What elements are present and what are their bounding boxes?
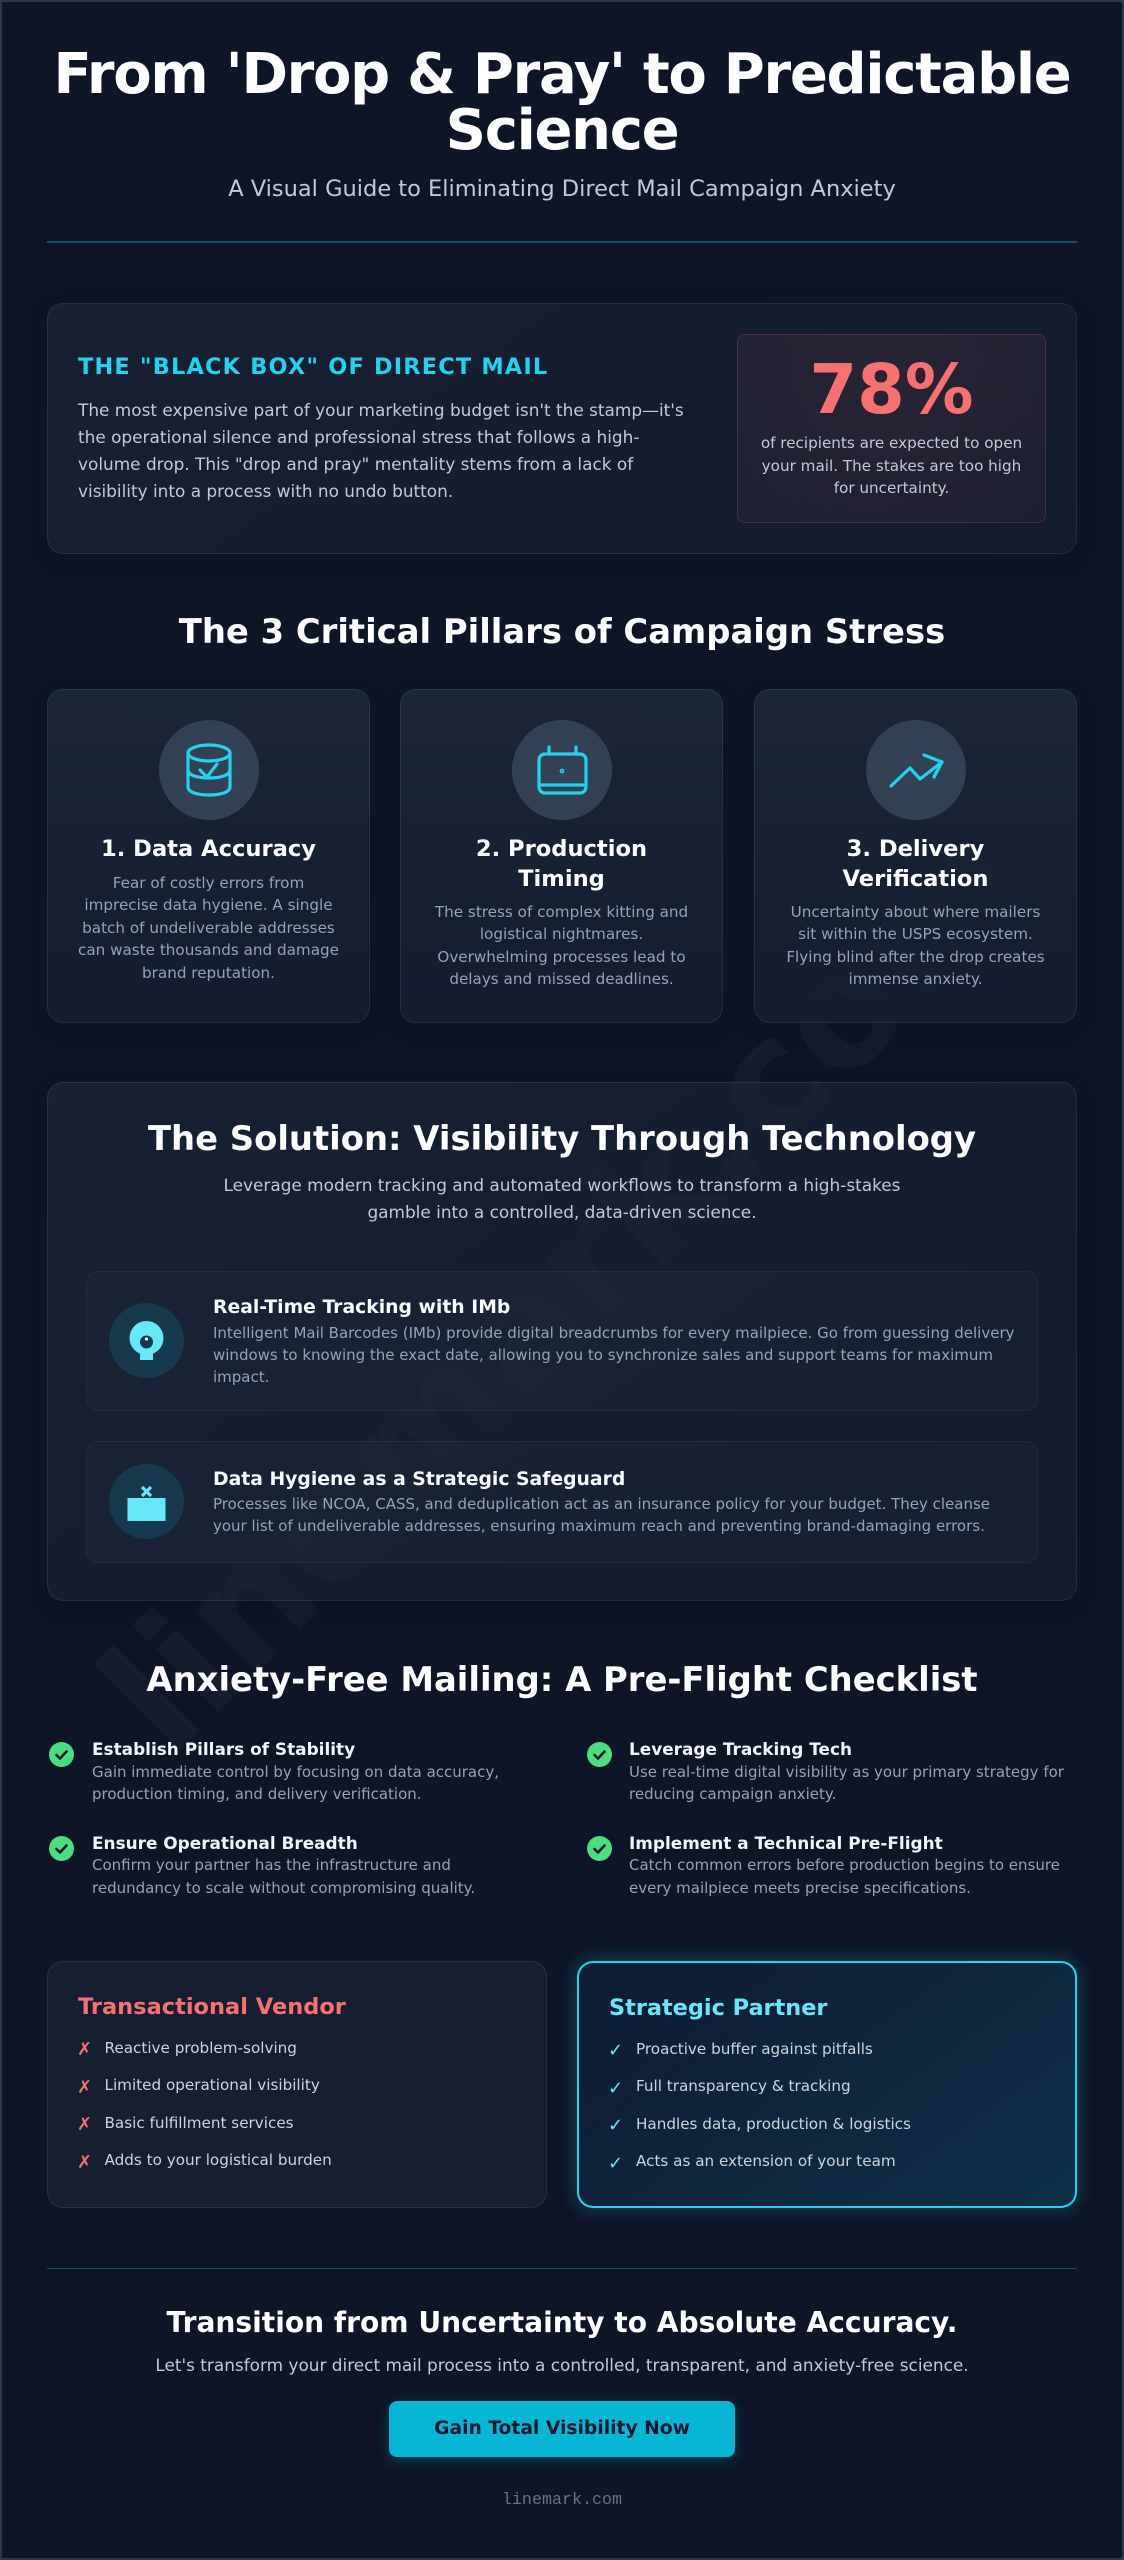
checklist item: breadth: [49, 1832, 475, 1897]
button: Gain Total Visibility Now: [434, 2418, 690, 2439]
feature text: [213, 1324, 1014, 1386]
feature: data hygiene: [86, 1441, 1038, 1563]
partner title: Strategic Partner: [609, 1994, 827, 2020]
panel body text: the operational silence and professional stress that follows a high-: [78, 427, 639, 447]
item text: Catch common errors before production begins to ensure: [629, 1856, 1060, 1874]
vendor list: [77, 2038, 332, 2173]
item title: Leverage Tracking Tech: [629, 1739, 852, 1759]
vendor list: ✗: [77, 2039, 92, 2060]
item text: [629, 1762, 1064, 1803]
item text: redundancy to scale without compromising quality.: [92, 1879, 475, 1897]
panel: solution: [47, 1082, 1077, 1601]
stat caption: of recipients are expected to open: [761, 434, 1022, 452]
card title: Verification: [842, 866, 988, 892]
panel: strategic partner: [577, 1961, 1077, 2208]
card title: 2. Production: [476, 836, 647, 862]
item text: reducing campaign anxiety.: [629, 1785, 836, 1803]
card text: delays and missed deadlines.: [449, 970, 674, 988]
card text: Overwhelming processes lead to: [437, 948, 686, 966]
item text: [92, 1762, 499, 1803]
button: [389, 2401, 735, 2457]
checklist item: tracking: [587, 1739, 1064, 1803]
card: delivery verification: [754, 689, 1077, 1023]
vendor title: Transactional Vendor: [78, 1994, 346, 2020]
footer url: linemark.com: [502, 2491, 622, 2510]
item text: Use real-time digital visibility as your primary strategy for: [629, 1762, 1064, 1780]
partner list: ✓: [608, 2153, 623, 2174]
panel body text: [78, 400, 684, 501]
partner list: [608, 2040, 911, 2174]
item text: Gain immediate control by focusing on data accuracy,: [92, 1762, 499, 1780]
panel: transactional vendor: [47, 1961, 547, 2208]
title: From 'Drop & Pray' to Predictable: [54, 42, 1070, 107]
checklist item: pillars: [49, 1739, 499, 1803]
title: Science: [446, 98, 678, 163]
footer divider: [47, 2268, 1077, 2269]
card: production timing: [400, 689, 723, 1023]
icon: tracking pin: [109, 1303, 184, 1378]
card text: brand reputation.: [142, 964, 275, 982]
item text: Confirm your partner has the infrastructure and: [92, 1856, 451, 1874]
icon: check: [49, 1742, 74, 1767]
partner list: ✓: [608, 2115, 623, 2136]
solution intro: [224, 1175, 900, 1222]
feature text: your list of undeliverable addresses, ensuring maximum reach and preventing brand-damaging errors.: [213, 1517, 985, 1535]
title: [54, 42, 1070, 163]
icon: trend arrow: [866, 720, 966, 820]
partner list: Handles data, production & logistics: [636, 2114, 911, 2132]
partner list: ✓: [608, 2040, 623, 2061]
panel body text: The most expensive part of your marketing budget isn't the stamp—it's: [78, 400, 684, 420]
partner list: Acts as an extension of your team: [636, 2152, 896, 2170]
card text: can waste thousands and damage: [78, 941, 339, 959]
card text: Flying blind after the drop creates: [786, 948, 1045, 966]
vendor list: Basic fulfillment services: [104, 2114, 294, 2132]
feature text: windows to knowing the exact date, allowing you to synchronize sales and support teams for maximum: [213, 1346, 993, 1364]
vendor list: Reactive problem-solving: [104, 2038, 297, 2056]
partner list: ✓: [608, 2078, 623, 2099]
item title: Establish Pillars of Stability: [92, 1739, 355, 1759]
card text: Fear of costly errors from: [113, 874, 304, 892]
heading: pillars: The 3 Critical Pillars of Campaign Stress: [179, 612, 945, 651]
panel heading: THE "BLACK BOX" OF DIRECT MAIL: [78, 354, 548, 380]
vendor list: Adds to your logistical burden: [104, 2151, 332, 2169]
feature text: [213, 1495, 990, 1535]
card text: [78, 874, 339, 982]
card title: [476, 836, 647, 892]
card title: 3. Delivery: [847, 836, 984, 862]
icon: check: [587, 1836, 612, 1861]
stat caption: your mail. The stakes are too high: [762, 457, 1021, 475]
feature title: Real-Time Tracking with IMb: [213, 1297, 510, 1318]
panel body text: volume drop. This "drop and pray" mentality stems from a lack of: [78, 454, 633, 474]
vendor list: Limited operational visibility: [104, 2076, 320, 2094]
panel body text: visibility into a process with no undo button.: [78, 481, 453, 501]
icon: database check: [159, 720, 259, 820]
card text: The stress of complex kitting and: [435, 903, 688, 921]
vendor list: ✗: [77, 2077, 92, 2098]
solution intro: Leverage modern tracking and automated workflows to transform a high-stakes: [224, 1175, 900, 1195]
solution intro: gamble into a controlled, data-driven science.: [367, 1202, 757, 1222]
solution heading: The Solution: Visibility Through Technology: [148, 1119, 976, 1158]
card text: batch of undeliverable addresses: [82, 919, 335, 937]
header divider: [47, 241, 1077, 243]
feature text: Processes like NCOA, CASS, and deduplication act as an insurance policy for your budget. They cleanse: [213, 1495, 990, 1513]
card text: immense anxiety.: [849, 970, 982, 988]
vendor list: ✗: [77, 2152, 92, 2173]
item text: [92, 1856, 475, 1897]
card title: 1. Data Accuracy: [101, 836, 316, 862]
card text: Uncertainty about where mailers: [791, 903, 1040, 921]
card title: Timing: [518, 866, 605, 892]
item text: production timing, and delivery verification.: [92, 1785, 422, 1803]
stat caption: [761, 434, 1022, 497]
vendor list: ✗: [77, 2114, 92, 2135]
stat box: 78%: [737, 334, 1046, 523]
icon: check: [49, 1836, 74, 1861]
icon: hygiene box: [109, 1464, 184, 1539]
partner list: Full transparency & tracking: [636, 2077, 851, 2095]
stat caption: for uncertainty.: [834, 479, 949, 497]
heading: checklist: Anxiety-Free Mailing: A Pre-Flight Checklist: [146, 1660, 978, 1699]
item text: every mailpiece meets precise specifications.: [629, 1879, 971, 1897]
partner list: Proactive buffer against pitfalls: [636, 2040, 873, 2058]
icon: calendar: [512, 720, 612, 820]
feature text: Intelligent Mail Barcodes (IMb) provide digital breadcrumbs for every mailpiece. Go from guessing delivery: [213, 1324, 1014, 1342]
stat number: 78%: [810, 350, 973, 430]
card text: [434, 903, 688, 988]
panel: black box: [47, 303, 1077, 554]
card text: logistical nightmares.: [480, 925, 643, 943]
call to action heading: Transition from Uncertainty to Absolute Accuracy.: [167, 2306, 957, 2339]
icon: check: [587, 1742, 612, 1767]
watermark: linemark.com: [65, 789, 1063, 1787]
card title: [842, 836, 988, 892]
item text: [629, 1856, 1060, 1897]
feature: IMb tracking: [86, 1271, 1038, 1411]
call to action text: Let's transform your direct mail process into a controlled, transparent, and anxiety-free science.: [155, 2355, 969, 2375]
item title: Implement a Technical Pre-Flight: [629, 1832, 943, 1852]
card: data accuracy: [47, 689, 370, 1023]
card text: sit within the USPS ecosystem.: [798, 925, 1033, 943]
feature title: Data Hygiene as a Strategic Safeguard: [213, 1469, 625, 1490]
subtitle: A Visual Guide to Eliminating Direct Mail Campaign Anxiety: [228, 176, 896, 202]
feature text: impact.: [213, 1368, 269, 1386]
card text: [786, 903, 1045, 988]
card text: imprecise data hygiene. A single: [84, 896, 333, 914]
item title: Ensure Operational Breadth: [92, 1832, 358, 1852]
checklist item: pre-flight: [587, 1832, 1060, 1897]
